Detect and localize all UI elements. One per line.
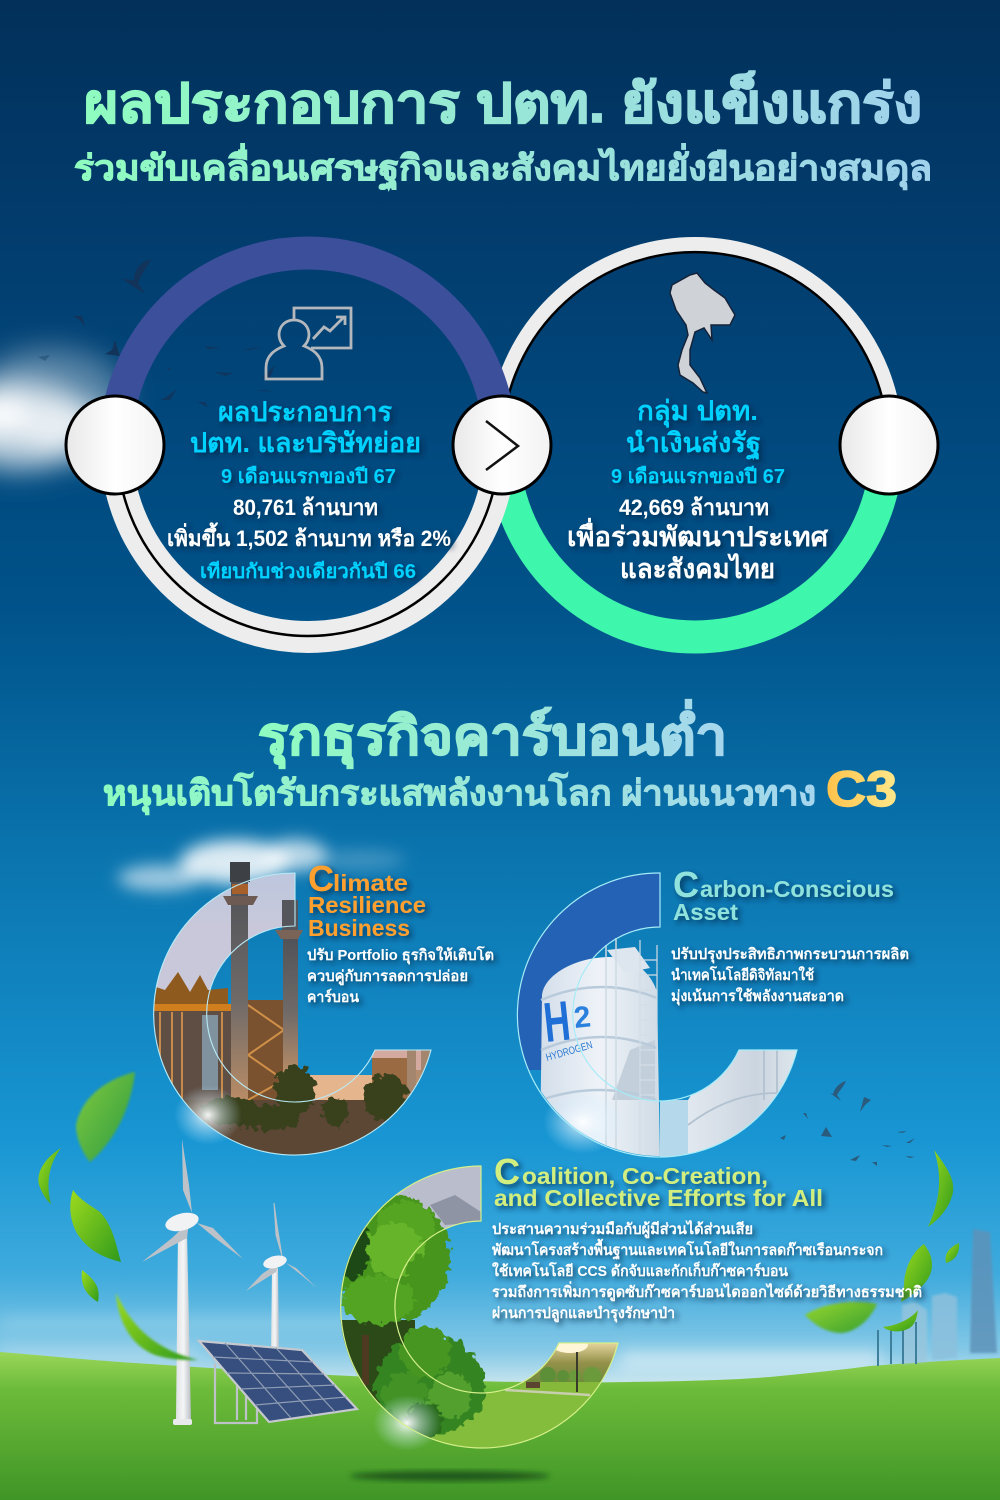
shadow under C3 (350, 1471, 550, 1481)
text block: PTT group state remittance: เพื่อร่วมพัฒนาประเทศ (567, 517, 829, 552)
leaf right blurred (805, 1302, 877, 1333)
leaf right broad (901, 1244, 932, 1302)
leaf long left (116, 1293, 198, 1360)
heading: Climate Resilience Business: Business (308, 915, 410, 941)
heading: Coalition (494, 1151, 823, 1211)
birds right (780, 1081, 915, 1166)
towers (902, 1229, 997, 1364)
text block: PTT and subsidiaries results: ปตท. และบริษัทย่อย (190, 428, 421, 458)
outline: C3 (341, 1166, 618, 1448)
leaf right tall (928, 1150, 953, 1227)
icon: Thailand map (670, 273, 735, 393)
heading: Coalition: and Collective Efforts for All (494, 1185, 823, 1211)
icon: presenter with chart (266, 308, 351, 379)
trees (334, 1194, 485, 1438)
leaves right (805, 1150, 959, 1333)
text block: C3 description: พัฒนาโครงสร้างพื้นฐานและเทคโนโลยีในการลดก๊าซเรือนกระจก (492, 1238, 883, 1260)
circle: left node (66, 396, 164, 494)
C image: hydrogen tank (540, 938, 660, 1160)
text block: PTT group state remittance (567, 396, 829, 584)
text block: PTT and subsidiaries results: 80,761 ล้านบาท (233, 495, 378, 520)
text block: PTT group state remittance: นำเงินส่งรัฐ (626, 428, 761, 461)
glow (543, 1090, 623, 1154)
heading: C3: C3 (826, 761, 897, 817)
heading: Carbon-Conscious Asset: C (673, 864, 699, 905)
C image: sky (396, 1166, 480, 1228)
text block: C1 description (307, 945, 494, 1006)
panel: Carbon-Conscious Asset (515, 864, 909, 1160)
heading: Carbon-Conscious Asset: arbon-Conscious (700, 876, 894, 902)
heading: Climate Resilience Business: limate (333, 870, 408, 896)
heading: low carbon business: รุกธุรกิจคาร์บอนต่ำ (258, 700, 727, 769)
text block: PTT group state remittance: 42,669 ล้านบาท (619, 495, 769, 520)
tower left (223, 862, 258, 1100)
subtitle: ร่วมขับเคลื่อนเศรษฐกิจและสังคมไทยยั่งยืนอย่างสมดุล (74, 143, 932, 191)
heading: Carbon-Conscious Asset (673, 864, 894, 925)
illustration: solar panel (199, 1341, 357, 1423)
leaves left (38, 1072, 198, 1360)
text block: C1 description: คาร์บอน (307, 988, 360, 1006)
text block: C1 description: ควบคู่กับการลดการปล่อย (307, 968, 468, 986)
glow (373, 1395, 441, 1451)
circle: right node (840, 396, 938, 494)
illustration: wind turbines (142, 1139, 317, 1425)
C image: blue upper (515, 870, 661, 1070)
leaf large left (70, 1190, 121, 1262)
glow (174, 1085, 242, 1145)
panel: twin rings (66, 245, 938, 637)
text block: PTT and subsidiaries results: เพิ่มขึ้น 1,502 ล้านบาท หรือ 2% (167, 522, 451, 551)
text block: PTT group state remittance: และสังคมไทย (620, 553, 775, 584)
heading: Coalition: C (494, 1151, 520, 1192)
heading: Climate Resilience Business (308, 858, 426, 941)
cloud left (0, 347, 125, 470)
text block: PTT group state remittance: 9 เดือนแรกของปี 67 (611, 465, 785, 488)
heading: Coalition: oalition, Co-Creation, (522, 1163, 768, 1189)
leaf right thin (883, 1310, 918, 1331)
C image: power plant foreground (154, 972, 389, 1154)
text block: PTT and subsidiaries results (167, 397, 451, 583)
C image: grass and park (340, 1320, 592, 1448)
text block: C3 description: รวมถึงการเพิ่มการดูดซับก๊าซคาร์บอนไดออกไซด์ด้วยวิธีทางธรรมชาติ (492, 1281, 922, 1302)
panel: Climate Resilience Business (150, 858, 494, 1160)
leaf blurred top left (76, 1072, 135, 1162)
C image: arm with sky and second tank (660, 1050, 800, 1160)
ground: grass (0, 1352, 1000, 1500)
turbine small (246, 1203, 317, 1358)
leaf tiny left (82, 1270, 99, 1302)
text block: C2 description (671, 945, 909, 1006)
text block: C1 description: ปรับ Portfolio ธุรกิจให้เติบโต (307, 945, 494, 965)
outline: C2 (517, 873, 797, 1157)
text block: C2 description: ปรับปรุงประสิทธิภาพกระบวนการผลิต (671, 945, 909, 964)
text block: C2 description: นำเทคโนโลยีดิจิทัลมาใช้ (671, 965, 814, 984)
text block: C3 description: ใช้เทคโนโลยี CCS ดักจับและกักเก็บก๊าซคาร์บอน (492, 1261, 789, 1280)
hydrogen label: HYDROGEN (545, 1039, 594, 1064)
subheading: growth via C3: หนุนเติบโตรับกระแสพลังงานโลก ผ่านแนวทาง (103, 772, 816, 815)
text block: C3 description (492, 1219, 922, 1323)
trees (200, 1066, 408, 1130)
leaf small left (38, 1148, 61, 1204)
small 2: 2 (572, 1000, 592, 1035)
C image: park arm (504, 1344, 618, 1396)
heading: Climate Resilience Business: C (308, 858, 334, 899)
heading: Climate Resilience Business: Resilience (308, 892, 426, 918)
heading: Carbon-Conscious Asset: Asset (673, 899, 738, 925)
C image: sky (150, 870, 300, 1020)
city skyline (878, 1229, 997, 1366)
leaf right tiny (946, 1243, 959, 1263)
title: ผลประกอบการ ปตท. ยังแข็งแกร่ง (84, 72, 922, 134)
outline: C1 (154, 873, 431, 1155)
H2 label: H (541, 989, 573, 1054)
text block: PTT and subsidiaries results: ผลประกอบการ (218, 397, 392, 427)
circle: middle node with arrow (453, 396, 551, 494)
mist near horizon (0, 1318, 880, 1370)
panel: Coalition (334, 1151, 922, 1451)
C image: right arm structures (372, 1050, 430, 1100)
birds upper left (38, 259, 275, 407)
cloud near plant (118, 839, 405, 891)
tower right (275, 900, 303, 1075)
text block: PTT and subsidiaries results: เทียบกับช่วงเดียวกันปี 66 (200, 560, 416, 583)
text block: C3 description: ประสานความร่วมมือกับผู้มีส่วนได้ส่วนเสีย (492, 1219, 753, 1239)
turbine large (142, 1139, 243, 1425)
ring: right top grey and bottom green (495, 245, 895, 637)
text block: C3 description: ผ่านการปลูกและบำรุงรักษาป่า (492, 1305, 675, 1323)
text block: PTT group state remittance: กลุ่ม ปตท. (637, 396, 758, 428)
ring: left top purple and bottom grey (116, 253, 500, 637)
text block: PTT and subsidiaries results: 9 เดือนแรกของปี 67 (221, 465, 396, 488)
text block: C2 description: มุ่งเน้นการใช้พลังงานสะอาด (671, 987, 844, 1006)
smoke stacks (878, 1322, 916, 1366)
